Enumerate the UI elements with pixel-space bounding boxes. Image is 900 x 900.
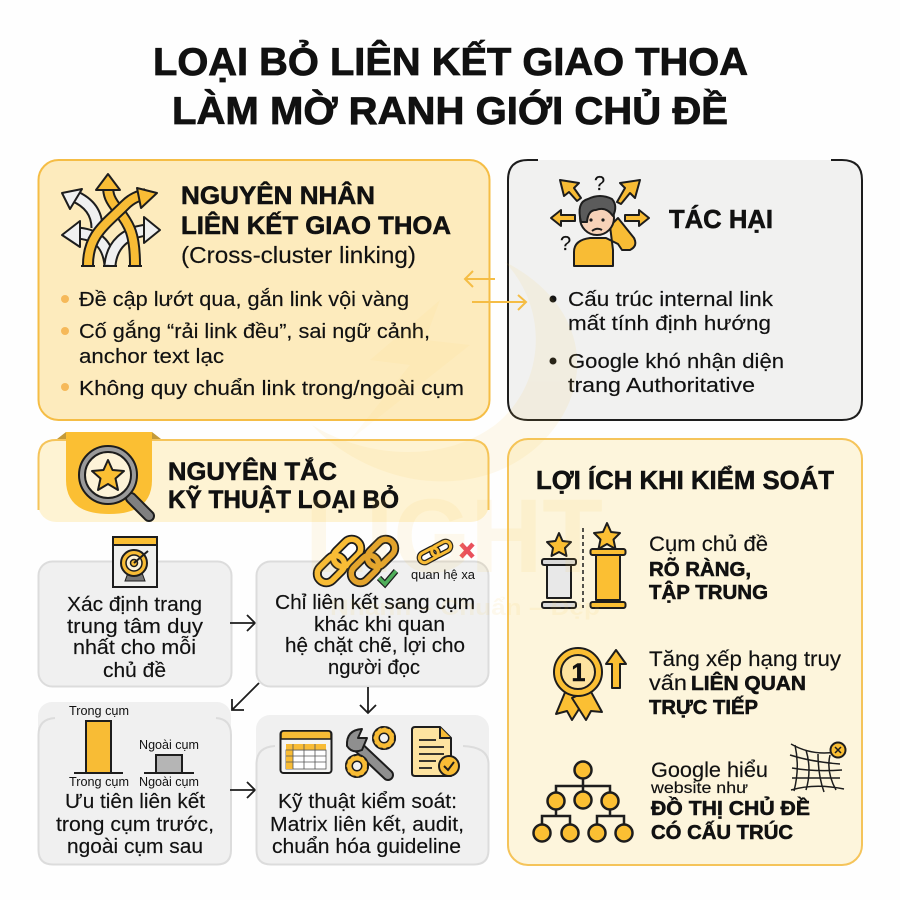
icon: medal with up arrow: 1: [572, 659, 586, 687]
title: LOẠI BỎ LIÊN KẾT GIAO THOA: [153, 40, 748, 84]
heading: causes: LIÊN KẾT GIAO THOA: [181, 210, 451, 240]
heading: techniques: KỸ THUẬT LOẠI BỎ: [168, 484, 399, 514]
icon: wrench and gears: [346, 727, 395, 777]
list: causes: anchor text lạc: [79, 346, 224, 368]
heading: techniques: NGUYÊN TẮC: [168, 456, 337, 486]
arrow: to harm: [472, 295, 526, 310]
heading: harm: TÁC HẠI: [669, 204, 773, 234]
list: harm: Cấu trúc internal link: [568, 289, 774, 311]
text: related clusters: Chỉ liên kết sang cụm: [275, 592, 475, 614]
text: ranking: [649, 648, 842, 719]
text: topic graph: Google hiểu: [651, 759, 768, 782]
text: ranking: Tăng xếp hạng truy: [649, 648, 842, 671]
text: ranking: vấn: [649, 672, 687, 695]
list: causes: Đề cập lướt qua, gắn link vội vàng: [79, 288, 409, 311]
text: related clusters: khác khi quan: [314, 614, 445, 636]
arrow: back to causes: [465, 271, 495, 287]
text: related clusters: hệ chặt chẽ, lợi cho: [285, 635, 465, 657]
text: topic graph: [650, 759, 810, 844]
bar chart: in cluster vs out of cluster: Ngoài cụm: [139, 738, 199, 752]
text: control techniques: chuẩn hóa guideline: [272, 836, 461, 858]
text: clear clusters: Cụm chủ đề: [649, 533, 768, 556]
text: related clusters: [275, 592, 475, 679]
text: priority: ngoài cụm sau: [67, 836, 203, 858]
bar chart: in cluster vs out of cluster: [69, 704, 199, 789]
icon: chain links approved: [314, 536, 398, 586]
panel: causes: [38, 160, 490, 420]
text: topic graph: CÓ CẤU TRÚC: [651, 820, 793, 844]
title: [153, 40, 748, 133]
heading: techniques: [168, 456, 399, 514]
text: topic graph: ĐỒ THỊ CHỦ ĐỀ: [651, 796, 810, 820]
text: ranking: LIÊN QUAN: [691, 671, 806, 695]
text: control techniques: Kỹ thuật kiểm soát:: [278, 791, 457, 813]
text: central page: Xác định trang: [67, 594, 202, 616]
icon: guideline document: [412, 727, 459, 776]
icon: topic tree: [534, 762, 632, 842]
text: control techniques: Matrix liên kết, audit,: [270, 814, 464, 836]
text: central page: trung tâm duy: [67, 616, 203, 638]
icon: tangled net: [790, 742, 846, 792]
text: priority: Ưu tiên liên kết: [65, 791, 205, 813]
icon: confused person: ?: [594, 173, 605, 195]
icon: magnifier with star: [82, 449, 149, 516]
list: harm: Google khó nhận diện: [568, 351, 784, 373]
card: control techniques: [256, 715, 489, 865]
watermark: LIGHT: [305, 478, 603, 595]
heading: causes: (Cross-cluster linking): [181, 242, 416, 268]
arrow: step 2 to 3: [232, 683, 259, 710]
text: control techniques: [270, 791, 464, 858]
title: LÀM MỜ RANH GIỚI CHỦ ĐỀ: [172, 89, 728, 133]
icon: confused person: ?: [560, 233, 571, 255]
icon: target page: [113, 537, 157, 587]
list: harm: mất tính định hướng: [568, 313, 771, 335]
card: priority: [38, 702, 231, 865]
heading: benefits: LỢI ÍCH KHI KIỂM SOÁT: [536, 465, 834, 495]
icon: medal with up arrow: [554, 648, 626, 720]
text: clear clusters: RÕ RÀNG,: [649, 557, 751, 581]
card: related clusters: [256, 536, 488, 686]
icon: matrix table: [280, 731, 332, 773]
text: central page: chủ đề: [103, 660, 166, 682]
list: causes: Không quy chuẩn link trong/ngoài cụm: [79, 378, 464, 400]
icon: weak chain link rejected: [411, 540, 475, 582]
text: priority: [56, 791, 214, 858]
bar chart: in cluster vs out of cluster: Trong cụm: [69, 775, 129, 789]
text: topic graph: website như: [650, 780, 748, 797]
panel: benefits: [508, 439, 862, 865]
card: central page: [38, 537, 232, 686]
heading: causes: NGUYÊN NHÂN: [181, 180, 375, 210]
list: harm: [550, 289, 784, 397]
text: clear clusters: TẬP TRUNG: [649, 580, 768, 604]
icon: confused person: [551, 173, 649, 266]
heading: causes: [181, 180, 451, 268]
icon: pillars with stars: [542, 523, 626, 608]
text: central page: [67, 594, 203, 682]
watermark: Nhanh – Chuẩn – Đẹp: [330, 595, 600, 620]
list: causes: Cố gắng “rải link đều”, sai ngữ cảnh,: [79, 320, 430, 343]
icon: crossing arrows: [62, 174, 160, 266]
icon: weak chain link rejected: quan hệ xa: [411, 568, 475, 582]
list: harm: trang Authoritative: [568, 375, 755, 397]
arrow: step 3 to 4: [230, 782, 255, 798]
arrow: step 1 to 2: [230, 615, 255, 631]
watermark: [305, 262, 603, 620]
text: ranking: TRỰC TIẾP: [649, 696, 758, 719]
panel: harm: [508, 160, 862, 420]
bar chart: in cluster vs out of cluster: Ngoài cụm: [139, 775, 199, 789]
text: clear clusters: [649, 533, 768, 604]
panel: techniques header: [38, 432, 489, 522]
bar chart: in cluster vs out of cluster: Trong cụm: [69, 704, 129, 718]
text: related clusters: người đọc: [328, 657, 420, 679]
list: causes: [61, 288, 464, 400]
text: priority: trong cụm trước,: [56, 814, 214, 836]
arrow: step 2 to 4: [360, 687, 376, 713]
text: central page: nhất cho mỗi: [73, 636, 196, 659]
